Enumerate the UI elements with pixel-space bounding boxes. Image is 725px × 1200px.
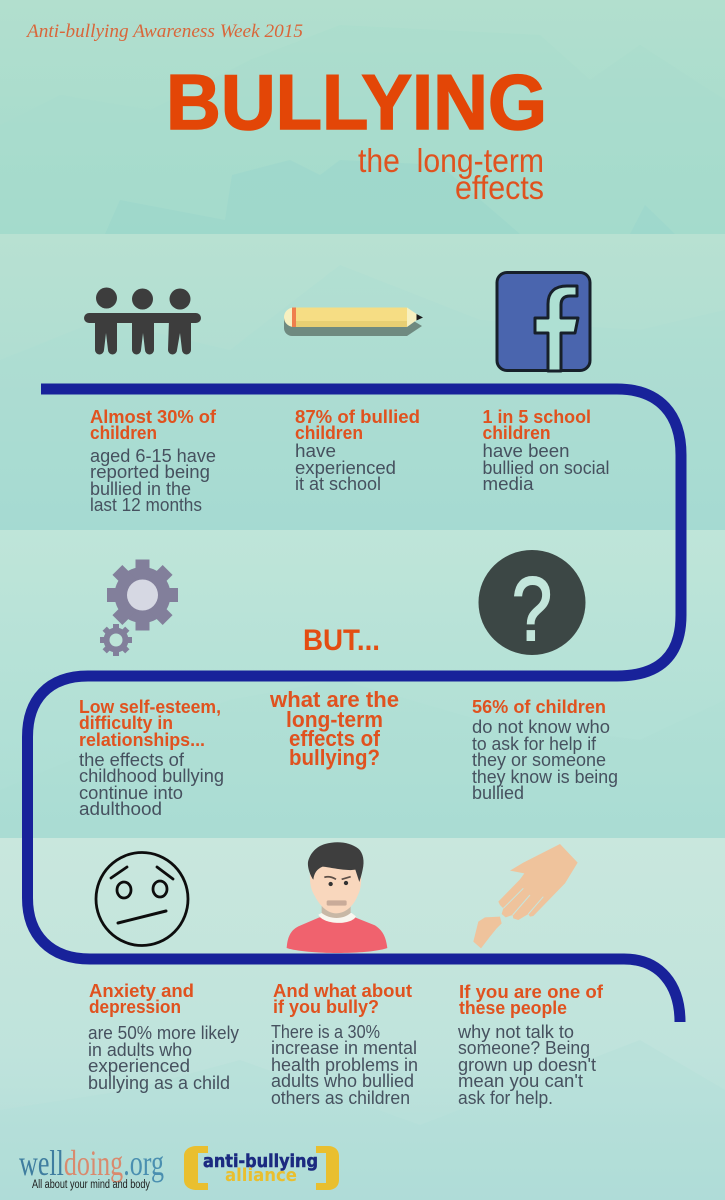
- text: 87%: it at school: [295, 474, 381, 494]
- text: these people: mean you can't: [458, 1071, 583, 1091]
- panel: 56% of children: [472, 550, 618, 803]
- content band 2 background: [0, 530, 725, 838]
- text: almost 30%: aged 6-15 have: [90, 446, 216, 466]
- logo: anti-bullying alliance: alliance: [225, 1165, 297, 1186]
- content band 1 background: [0, 234, 725, 530]
- subtitle: [358, 142, 544, 206]
- question text: [269, 687, 399, 770]
- text: 1 in 5: 1 in 5 school: [482, 406, 591, 427]
- panel: low self-esteem: [79, 560, 224, 819]
- text: 56%: they or someone: [472, 750, 606, 770]
- text: 87%: [295, 406, 420, 494]
- panel: almost 30% of children: [84, 288, 217, 515]
- text: anxiety: Anxiety and: [89, 980, 194, 1001]
- text: almost 30%: bullied in the: [90, 479, 191, 499]
- icon: facebook logo: [497, 272, 590, 371]
- panel: if you are one of these people: [457, 844, 604, 1108]
- icon: adult and child hands: [473, 844, 578, 948]
- text: almost 30%: [90, 406, 217, 515]
- text: anxiety: in adults who: [88, 1040, 192, 1060]
- text: 87%: have: [295, 441, 336, 461]
- heading: but: BUT...: [303, 624, 380, 657]
- logo: anti-bullying alliance: [184, 1146, 339, 1190]
- text: anxiety: are 50% more likely: [88, 1023, 239, 1043]
- text: low self-esteem: continue into: [79, 783, 183, 803]
- text: 56%: bullied: [472, 783, 524, 803]
- text: anxiety: bullying as a child: [88, 1073, 230, 1093]
- text: anxiety: depression: [89, 996, 181, 1017]
- awareness week label: Anti-bullying Awareness Week 2015: [25, 22, 303, 42]
- text: these people: someone? Being: [458, 1038, 590, 1058]
- text: if you bully: if you bully?: [273, 996, 379, 1017]
- text: 1 in 5: media: [482, 474, 535, 494]
- subtitle: the long-term: [358, 142, 544, 179]
- logo: welldoing.org: welldoing.org: [19, 1143, 164, 1183]
- text: 1 in 5: children: [482, 422, 550, 443]
- icon: gears: [100, 560, 178, 656]
- panel: 87% of bullied children: [284, 308, 423, 494]
- text: these people: ask for help.: [458, 1088, 553, 1108]
- icon: question mark: [478, 550, 586, 660]
- text: 56%: do not know who: [472, 717, 610, 737]
- text: low self-esteem: difficulty in: [79, 712, 173, 733]
- text: if you bully: [271, 980, 418, 1108]
- text: if you bully: adults who bullied: [271, 1071, 414, 1091]
- text: 1 in 5: bullied on social: [482, 458, 610, 478]
- panel: anxiety and depression: [88, 852, 239, 1093]
- text: almost 30%: last 12 months: [90, 495, 202, 515]
- text: low self-esteem: adulthood: [79, 799, 162, 819]
- icon: question mark: ?: [512, 560, 552, 660]
- logo: welldoing.org: All about your mind and body: [32, 1179, 150, 1191]
- text: if you bully: others as children: [271, 1088, 410, 1108]
- text: if you bully: health problems in: [271, 1055, 418, 1075]
- text: 1 in 5: have been: [482, 441, 570, 461]
- text: almost 30%: children: [90, 422, 157, 443]
- text: low self-esteem: the effects of: [79, 750, 185, 770]
- text: anxiety: [88, 980, 239, 1093]
- question text: effects of: [289, 726, 380, 751]
- icon: pencil: [284, 308, 423, 336]
- text: almost 30%: Almost 30% of: [90, 406, 217, 427]
- text: low self-esteem: [79, 696, 224, 819]
- text: if you bully: increase in mental: [271, 1038, 417, 1058]
- panel: what about if you bully: [271, 842, 418, 1108]
- text: 87%: experienced: [295, 458, 396, 478]
- text: anxiety: experienced: [88, 1056, 190, 1076]
- text: low self-esteem: childhood bullying: [79, 766, 224, 786]
- subtitle: effects: [455, 169, 544, 206]
- text: 87%: children: [295, 422, 363, 443]
- text: 56%: [472, 696, 618, 803]
- question text: long-term: [286, 707, 383, 732]
- text: 56%: to ask for help if: [472, 734, 597, 754]
- icon: sad boy: [287, 842, 387, 953]
- text: if you bully: And what about: [273, 980, 412, 1001]
- winding blue timeline path: [28, 389, 681, 1022]
- panel: 1 in 5 school children: [482, 272, 610, 494]
- content band 3 background: [0, 838, 725, 1200]
- text: 1 in 5: [482, 406, 610, 494]
- text: almost 30%: reported being: [90, 462, 210, 482]
- text: these people: grown up doesn't: [458, 1055, 596, 1075]
- text: these people: [457, 981, 604, 1108]
- text: 87%: 87% of bullied: [295, 406, 420, 427]
- panel: but what are the long-term effects: [269, 624, 399, 770]
- icon: three people linked: [84, 288, 201, 354]
- header: [25, 22, 547, 206]
- question text: what are the: [269, 687, 399, 712]
- text: low self-esteem: Low self-esteem,: [79, 696, 221, 717]
- logo: anti-bullying alliance: anti-bullying: [203, 1151, 318, 1172]
- text: 56%: they know is being: [472, 767, 618, 787]
- question text: bullying?: [289, 745, 380, 770]
- text: these people: why not talk to: [457, 1022, 574, 1042]
- icon: worried face: [96, 852, 188, 946]
- title: BULLYING: [166, 58, 547, 146]
- text: 56%: 56% of children: [472, 696, 606, 717]
- header band background: [0, 0, 725, 234]
- text: these people: If you are one of: [459, 981, 604, 1002]
- text: low self-esteem: relationships...: [79, 729, 205, 750]
- text: if you bully: There is a 30%: [271, 1022, 380, 1042]
- text: these people: these people: [459, 997, 567, 1018]
